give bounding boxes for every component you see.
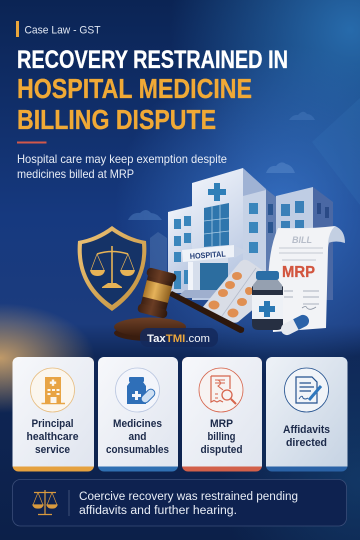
card: MRP billing disputed: MRP bbox=[210, 418, 233, 430]
illustration: hospital building bbox=[168, 168, 333, 300]
title: RECOVERY RESTRAINED IN bbox=[17, 46, 288, 74]
left wing bbox=[168, 206, 192, 293]
title: BILLING DISPUTE bbox=[17, 104, 216, 135]
card: principal healthcare service: healthcare bbox=[26, 431, 78, 443]
tower window bbox=[204, 203, 229, 247]
right wing bbox=[266, 187, 333, 300]
icon: clouds bbox=[128, 112, 315, 220]
title bbox=[17, 46, 288, 135]
hospital sign: HOSPITAL bbox=[190, 249, 226, 261]
card: medicines and consumables: and bbox=[128, 431, 146, 443]
icon: medicine bottle bbox=[252, 271, 283, 330]
icon: pill blister pack bbox=[202, 260, 262, 323]
card: medicines and consumables bbox=[98, 357, 178, 472]
icon: capsule bbox=[279, 313, 311, 337]
icon: document with pen bbox=[284, 368, 328, 412]
card: MRP billing disputed: billing bbox=[208, 431, 236, 443]
title: HOSPITAL MEDICINE bbox=[17, 73, 252, 104]
logo: TaxTMI.com: TaxTMI.com bbox=[147, 333, 210, 345]
subtitle: Hospital care may keep exemption despite bbox=[17, 152, 227, 166]
tower side bbox=[243, 168, 273, 300]
subtitle: medicines billed at MRP bbox=[17, 167, 134, 181]
hospital sign bbox=[182, 245, 247, 262]
eyebrow: case law label bbox=[16, 21, 101, 37]
icon: rupee bill under magnifier bbox=[199, 368, 243, 412]
card: medicines and consumables: consumables bbox=[106, 444, 169, 456]
central tower bbox=[192, 168, 243, 300]
card: affidavits directed: directed bbox=[286, 437, 327, 449]
hospital cross bbox=[208, 183, 226, 201]
illustration: bill with MRP: BILL bbox=[292, 235, 312, 246]
illustration: bill with MRP: MRP bbox=[282, 264, 315, 281]
card: principal healthcare service bbox=[12, 357, 94, 472]
callout: outcome: affidavits and further hearing. bbox=[79, 505, 237, 517]
icon: shield with scales bbox=[78, 226, 146, 311]
icon: scales of justice bbox=[33, 490, 57, 514]
callout: outcome: Coercive recovery was restrained pending bbox=[79, 491, 298, 503]
accent rule bbox=[17, 142, 46, 144]
illustration: bill with MRP bbox=[268, 226, 345, 332]
card: MRP billing disputed: disputed bbox=[200, 444, 242, 456]
icon: hospital building bbox=[30, 368, 74, 412]
icon: medicine bottle and capsule bbox=[116, 368, 160, 412]
card: principal healthcare service: Principal bbox=[32, 418, 74, 430]
illustration: gavel bbox=[114, 267, 244, 341]
card: MRP billing disputed bbox=[182, 357, 262, 472]
subtitle bbox=[17, 152, 227, 181]
illustration: skyline bbox=[150, 232, 167, 287]
logo: TaxTMI.com bbox=[140, 328, 218, 347]
card: affidavits directed: Affidavits bbox=[283, 424, 330, 436]
card: medicines and consumables: Medicines bbox=[113, 418, 162, 430]
card: principal healthcare service: service bbox=[35, 444, 70, 456]
eyebrow: case law label: Case Law - GST bbox=[24, 24, 101, 36]
entrance bbox=[176, 258, 232, 298]
callout: outcome bbox=[12, 480, 346, 526]
card: affidavits directed bbox=[266, 357, 348, 472]
